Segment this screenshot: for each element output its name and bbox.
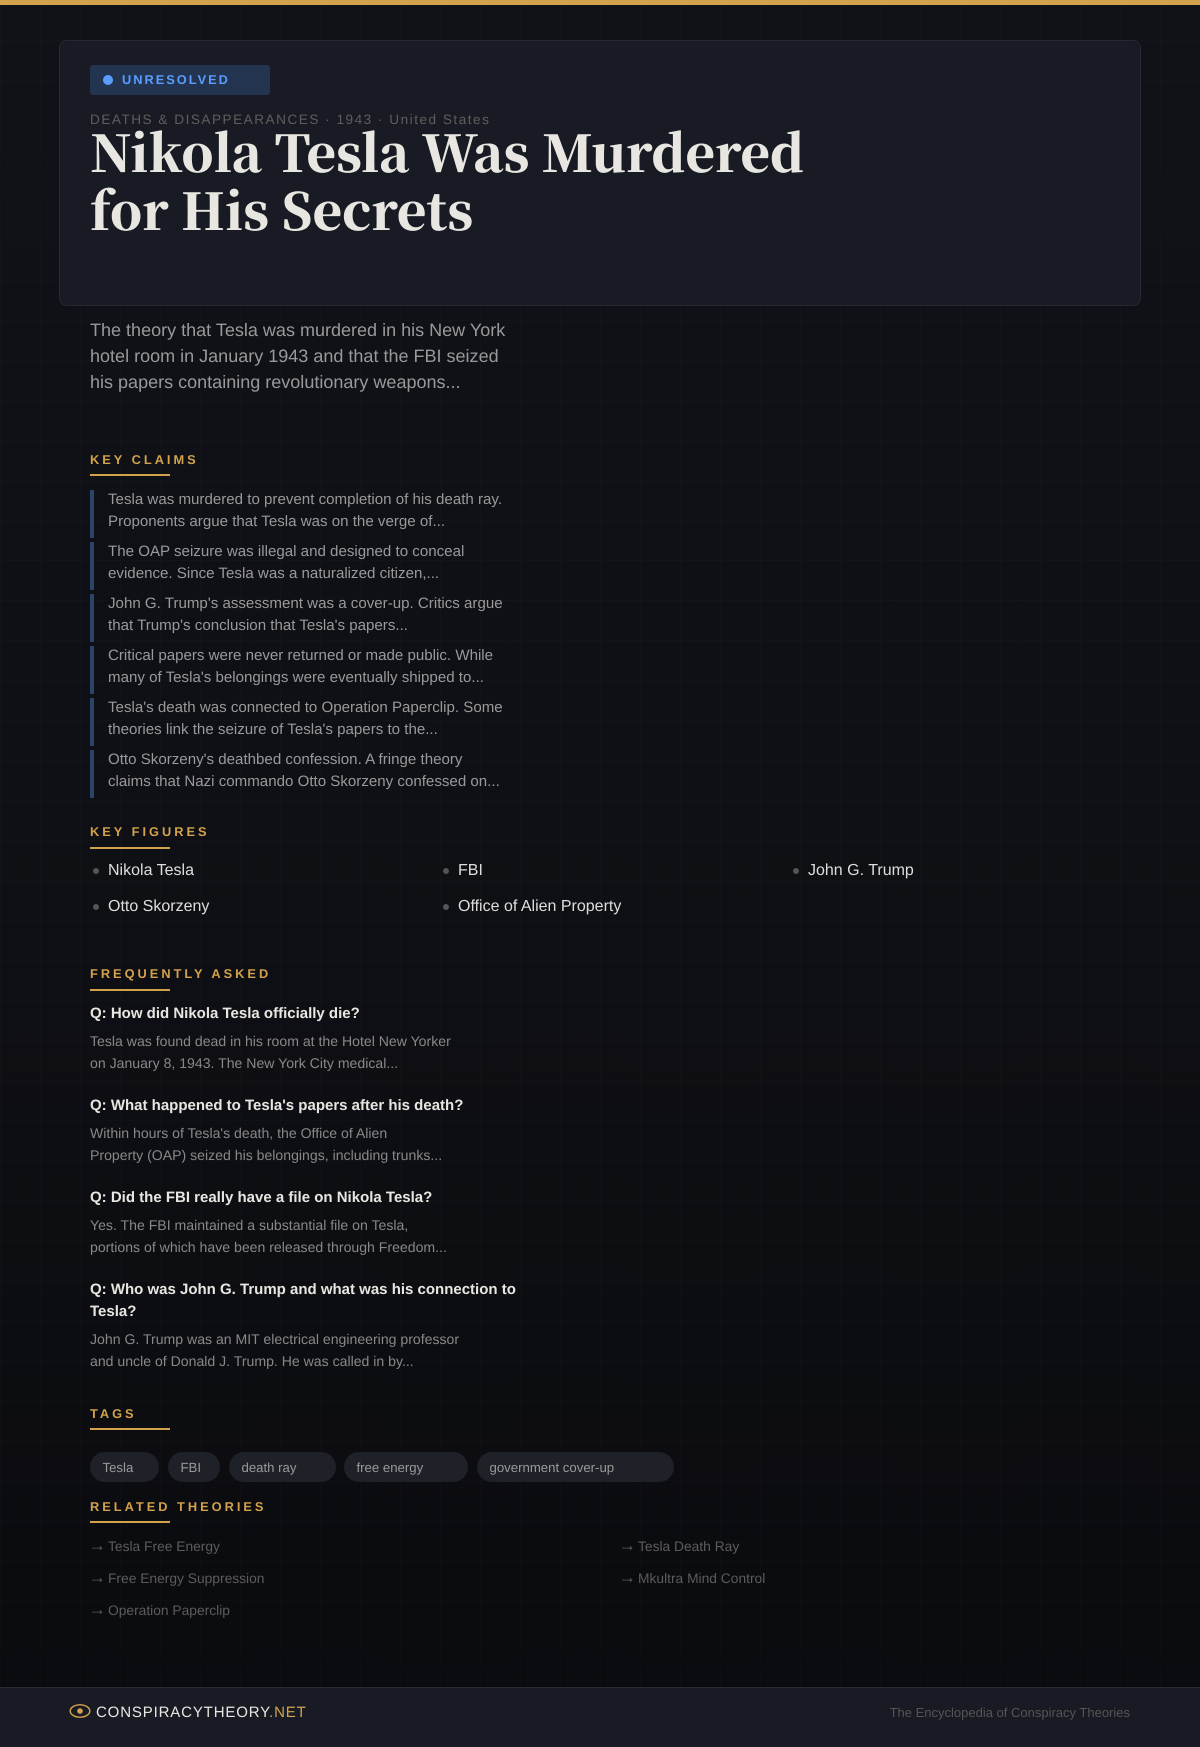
answer 1: on January 8, 1943. The New York City medical...	[90, 1055, 398, 1071]
link: Operation Paperclip: →	[88, 1598, 106, 1618]
link: Operation Paperclip	[88, 1598, 230, 1618]
answer 1	[90, 1033, 451, 1071]
answer 2	[90, 1125, 442, 1163]
intro text: The theory that Tesla was murdered in his New York	[90, 320, 505, 340]
claim 5: Tesla's death was connected to Operation Paperclip. Some	[108, 699, 503, 716]
answer 4	[90, 1331, 459, 1369]
meta line: DEATHS & DISAPPEARANCES · 1943 · United States	[90, 112, 490, 127]
question 4: Tesla?	[90, 1303, 136, 1320]
heading underline	[90, 847, 170, 849]
intro text	[90, 320, 506, 392]
claim 2	[90, 542, 510, 590]
heading underline	[90, 989, 170, 991]
heading: tags: TAGS	[90, 1406, 137, 1421]
link: Tesla Death Ray: Tesla Death Ray	[638, 1539, 739, 1554]
heading: key figures: KEY FIGURES	[90, 824, 210, 839]
tag: death ray: death ray	[242, 1460, 296, 1475]
answer 1: Tesla was found dead in his room at the Hotel New Yorker	[90, 1033, 451, 1049]
answer 3	[90, 1217, 447, 1255]
figure: Nikola Tesla: Nikola Tesla	[108, 862, 194, 879]
answer 3: portions of which have been released through Freedom...	[90, 1239, 447, 1255]
claim 1: Proponents argue that Tesla was on the verge of...	[108, 513, 445, 530]
section: frequently asked	[90, 966, 516, 1369]
question 4: Q: Who was John G. Trump and what was his connection to	[90, 1281, 516, 1298]
claim 3: that Trump's conclusion that Tesla's papers...	[108, 617, 408, 634]
badge: unresolved	[90, 65, 270, 95]
figure: FBI	[443, 862, 483, 879]
tag: FBI	[168, 1452, 220, 1482]
claim 2: The OAP seizure was illegal and designed to conceal	[108, 543, 464, 560]
tag: FBI: FBI	[180, 1460, 201, 1475]
tag: free energy: free energy	[356, 1460, 423, 1475]
title: for His Secrets	[90, 173, 473, 245]
heading: related theories: RELATED THEORIES	[90, 1499, 266, 1514]
tag: free energy	[344, 1452, 468, 1482]
link: Free Energy Suppression	[88, 1566, 264, 1586]
question 3: Q: Did the FBI really have a file on Nikola Tesla?	[90, 1189, 432, 1206]
tag: government cover-up: government cover-up	[490, 1460, 614, 1475]
link: Operation Paperclip: Operation Paperclip	[108, 1603, 230, 1618]
claim 3: John G. Trump's assessment was a cover-up. Critics argue	[108, 595, 503, 612]
footer tagline: The Encyclopedia of Conspiracy Theories	[890, 1705, 1130, 1720]
badge label: UNRESOLVED	[122, 72, 230, 87]
link: Tesla Free Energy	[88, 1534, 220, 1554]
answer 4: John G. Trump was an MIT electrical engineering professor	[90, 1331, 459, 1347]
claim 5	[90, 698, 510, 746]
panel: header card	[59, 40, 1141, 306]
link: Tesla Death Ray	[618, 1534, 740, 1554]
figure: Office of Alien Property: Office of Alien Property	[458, 898, 621, 915]
tag: death ray	[229, 1452, 336, 1482]
claim 5: theories link the seizure of Tesla's papers to the...	[108, 721, 438, 738]
answer 2: Within hours of Tesla's death, the Office of Alien	[90, 1125, 387, 1141]
title	[90, 115, 804, 245]
claim 1	[90, 490, 510, 538]
figure: Otto Skorzeny: Otto Skorzeny	[108, 898, 209, 915]
section: key claims	[90, 452, 503, 798]
tag: Tesla: Tesla	[102, 1460, 133, 1475]
icon: eye logo	[70, 1704, 90, 1718]
footer	[0, 1687, 1200, 1747]
answer 4: and uncle of Donald J. Trump. He was called in by...	[90, 1353, 414, 1369]
link: Tesla Free Energy: Tesla Free Energy	[108, 1539, 220, 1554]
logo wordmark: CONSPIRACYTHEORY.NET	[96, 1704, 307, 1721]
link: Tesla Free Energy: →	[88, 1534, 106, 1554]
heading: frequently asked: FREQUENTLY ASKED	[90, 966, 271, 981]
link: Free Energy Suppression: →	[88, 1566, 106, 1586]
tag: Tesla	[90, 1452, 159, 1482]
heading: key claims: KEY CLAIMS	[90, 452, 199, 467]
section: tags	[90, 1406, 674, 1482]
section: key figures	[90, 824, 914, 915]
link: Mkultra Mind Control	[618, 1566, 765, 1586]
link: Mkultra Mind Control: Mkultra Mind Control	[638, 1571, 765, 1586]
heading underline	[90, 1428, 170, 1430]
claim 2: evidence. Since Tesla was a naturalized citizen,...	[108, 565, 439, 582]
answer 2: Property (OAP) seized his belongings, including trunks...	[90, 1147, 442, 1163]
icon: status dot	[103, 75, 113, 85]
claim 3	[90, 594, 510, 642]
claim 1: Tesla was murdered to prevent completion of his death ray.	[108, 491, 502, 508]
claim 6: claims that Nazi commando Otto Skorzeny confessed on...	[108, 773, 500, 790]
claim 4: Critical papers were never returned or made public. While	[108, 647, 493, 664]
title: Nikola Tesla Was Murdered	[90, 115, 804, 187]
claim 6	[90, 750, 510, 798]
tag: government cover-up	[477, 1452, 674, 1482]
question 4	[90, 1281, 516, 1320]
question 1: Q: How did Nikola Tesla officially die?	[90, 1005, 360, 1022]
section: related theories	[88, 1499, 765, 1618]
heading underline	[90, 1521, 170, 1523]
figure: FBI: FBI	[458, 862, 483, 879]
figure: John G. Trump: John G. Trump	[808, 862, 914, 879]
answer 3: Yes. The FBI maintained a substantial file on Tesla,	[90, 1217, 408, 1233]
claim 6: Otto Skorzeny's deathbed confession. A fringe theory	[108, 751, 462, 768]
link: Mkultra Mind Control: →	[618, 1566, 636, 1586]
link: Tesla Death Ray: →	[618, 1534, 636, 1554]
intro text: his papers containing revolutionary weapons...	[90, 372, 461, 392]
intro text: hotel room in January 1943 and that the FBI seized	[90, 346, 499, 366]
claim 4: many of Tesla's belongings were eventually shipped to...	[108, 669, 484, 686]
heading underline	[90, 474, 170, 476]
claim 4	[90, 646, 510, 694]
question 2: Q: What happened to Tesla's papers after his death?	[90, 1097, 463, 1114]
link: Free Energy Suppression: Free Energy Suppression	[108, 1571, 264, 1586]
